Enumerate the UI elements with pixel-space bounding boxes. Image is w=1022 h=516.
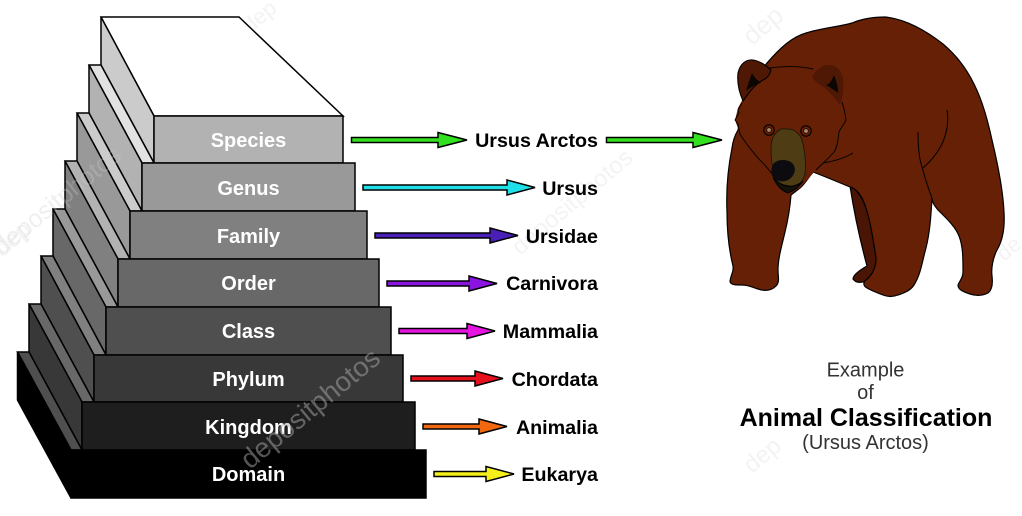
arrow: phylum [411, 371, 503, 386]
faint watermark: depositphotos [507, 144, 638, 261]
bear head [735, 67, 846, 193]
bear eyes [764, 125, 811, 136]
arrow: kingdom [423, 419, 507, 434]
faint watermark: dep [737, 0, 789, 51]
step: species [101, 17, 343, 163]
bear right ear [812, 65, 843, 105]
step: family [77, 113, 367, 259]
caption title: Animal Classification [740, 404, 992, 432]
step: species: Species [211, 130, 286, 152]
arrow: family [375, 228, 518, 243]
caption line: of: of [857, 382, 874, 404]
illustration: brown bear [727, 17, 1004, 296]
step: order: Order [221, 273, 276, 295]
step: phylum [41, 256, 403, 402]
bear body creases [918, 110, 948, 198]
label: Mammalia: Mammalia [503, 321, 599, 343]
classification staircase [18, 17, 426, 498]
caption [740, 360, 992, 454]
label: Ursus Arctos: Ursus Arctos [475, 130, 598, 152]
step: domain [18, 352, 426, 498]
step: kingdom [29, 304, 415, 450]
label: Animalia: Animalia [516, 417, 599, 439]
arrow: class [399, 324, 495, 338]
step: class [53, 209, 391, 355]
step: genus: Genus [217, 178, 280, 200]
caption line: Example: Example [827, 360, 904, 382]
bear snout [771, 129, 805, 192]
step: class: Class [222, 321, 275, 343]
bear nose [771, 160, 795, 181]
watermark [0, 141, 386, 475]
arrow: species to Ursus Arctos [352, 132, 467, 148]
step: family: Family [217, 226, 281, 248]
step: kingdom: Kingdom [205, 417, 292, 439]
bear mouth [773, 177, 803, 193]
caption line: species name: (Ursus Arctos) [802, 432, 929, 454]
arrow: Ursus Arctos to bear [606, 132, 722, 148]
faint watermark: dep [739, 432, 787, 479]
label: Carnivora: Carnivora [506, 273, 599, 295]
step: phylum: Phylum [212, 369, 285, 391]
bear body [727, 17, 1004, 296]
label: Ursidae: Ursidae [526, 226, 598, 248]
bear far leg [850, 186, 877, 282]
bear head lines [735, 67, 853, 174]
watermark: depositphotos [234, 342, 386, 475]
arrow: order [387, 276, 497, 291]
bear left ear [738, 60, 771, 101]
label: Eukarya: Eukarya [521, 464, 599, 486]
arrow: domain [434, 466, 514, 482]
label: Ursus: Ursus [542, 178, 598, 200]
arrow: genus [363, 180, 535, 195]
step: genus [89, 65, 355, 211]
label: Chordata: Chordata [512, 369, 599, 391]
step: domain: Domain [212, 464, 285, 486]
step: order [65, 161, 379, 307]
